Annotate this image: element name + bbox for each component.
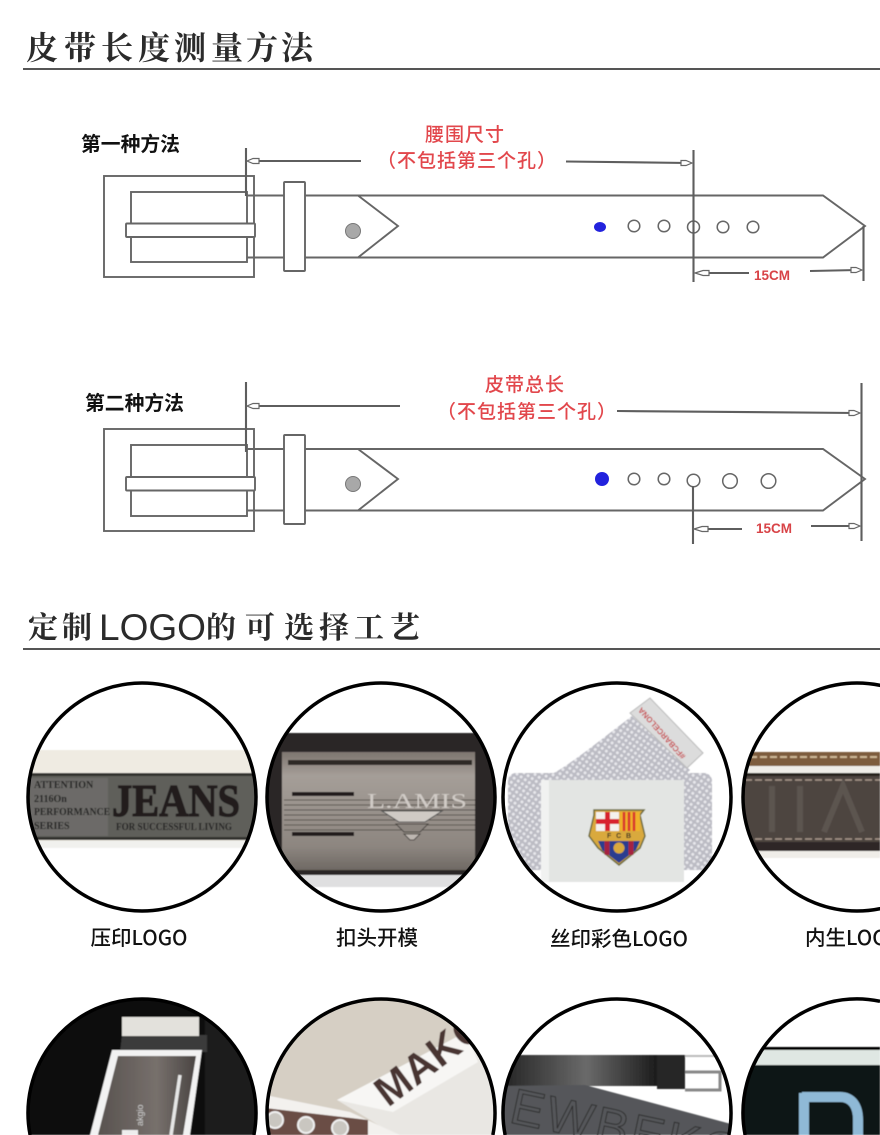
title: logo craft options: 定制	[28, 612, 92, 645]
photo circle: embossed jeans logo: 2116On	[34, 794, 67, 805]
photo circle: woven strap: MAKO	[365, 1000, 496, 1115]
title: logo craft options: LOGO	[99, 607, 206, 648]
photo circle: automatic buckle	[20, 995, 265, 1135]
belt holes 2	[595, 472, 776, 488]
photo circle: embossed jeans logo: FOR SUCCESSFUL LIVING	[116, 822, 232, 833]
photo circle: embossed jeans logo: ATTENTION	[34, 780, 94, 791]
photo circle: moulded buckle	[265, 683, 500, 911]
caption: embossed logo: 压印LOGO	[90, 921, 188, 951]
photo circle: embossed jeans logo	[20, 683, 260, 911]
label: first method: 第一种方法	[81, 133, 180, 156]
panel: first method diagram	[81, 124, 865, 283]
title: logo craft options: 的可选择工艺	[206, 612, 420, 645]
photo circle: woven logo	[740, 999, 880, 1135]
label: waist size: 腰围尺寸	[425, 124, 505, 146]
photo circle: embossed jeans logo: PERFORMANCE	[34, 807, 110, 818]
panel: second method diagram	[85, 374, 865, 544]
waist dimension arrows 1	[246, 148, 864, 282]
label: second method: 第二种方法	[85, 392, 184, 415]
label: 15cm: 15CM	[754, 268, 790, 283]
belt holes 1	[594, 220, 759, 233]
label: excluding third hole 2: （不包括第三个孔）	[437, 401, 617, 423]
photo circle: embossed jeans logo: SERIES	[34, 821, 70, 832]
photo circle: screen printed colour logo	[503, 683, 731, 911]
total length dimension arrows 2	[246, 382, 862, 544]
caption: buckle mould: 扣头开模	[336, 921, 418, 951]
belt drawing 2	[104, 429, 865, 531]
icon: club crest: FCB	[607, 833, 631, 840]
photo circle: debossed belt	[501, 997, 733, 1135]
caption: silk print colour logo: 丝印彩色LOGO	[550, 922, 688, 952]
label: total belt length: 皮带总长	[485, 374, 565, 396]
photo circle: embossed jeans logo: JEANS	[112, 775, 240, 826]
icon: club crest	[589, 810, 645, 865]
label: 15cm 2: 15CM	[756, 521, 792, 536]
title: belt length measuring: 皮带长度测量方法	[26, 30, 316, 66]
photo circle: inner logo	[740, 683, 880, 911]
photo circle: woven strap	[265, 995, 500, 1135]
photo circle: automatic buckle: akgio	[135, 1104, 145, 1126]
photo circle: screen printed colour logo: #FCBARCELONA	[636, 705, 687, 761]
belt drawing 1	[104, 176, 865, 277]
title: logo craft options	[23, 607, 880, 650]
label: excluding third hole: （不包括第三个孔）	[377, 150, 557, 172]
photo circle: moulded buckle: L.AMIS	[367, 789, 467, 813]
